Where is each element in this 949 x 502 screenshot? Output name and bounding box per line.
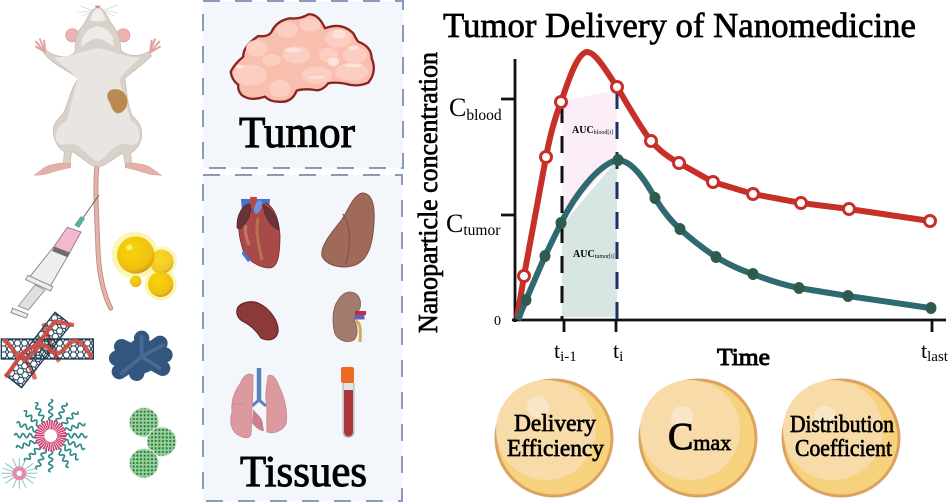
label: t i-1: i-1 [560,349,577,365]
tumor curve [518,154,936,320]
title: Tumor Delivery of Nanomedicine [443,6,916,45]
blood curve [517,52,936,318]
label: t i: t [613,338,619,363]
heading: Tissues: Tissues [240,447,367,496]
icon: kidney [333,292,365,342]
metric circle: Cmax: max [693,430,731,455]
chart: nanoparticle concentration over time [413,52,949,371]
mouse tail [96,165,111,308]
icon: syringe [11,195,99,318]
icon: tumor mass [231,14,374,102]
mouse tumor [107,89,128,114]
metric circle: distribution coefficient: Distribution [790,412,894,438]
icon: carbon nanotube with DNA ribbon [1,312,93,388]
label: t last: last [927,349,949,365]
label: C tumor: C [446,209,463,238]
dashed line: t i [616,92,618,320]
heading: Tumor: Tumor [239,108,355,157]
label: t i-1: t [554,338,560,363]
label: C blood: blood [466,107,502,124]
shaded area: AUC tumor [562,160,617,317]
metric circle: delivery efficiency: Efficiency [507,436,604,462]
icon: lungs [231,368,287,438]
metric circle: distribution coefficient [783,380,899,496]
label: t i: i [619,349,623,365]
panel: tumor [203,1,403,168]
dashed line: t i-1 [560,106,564,320]
icon: gold nanoparticles [112,232,177,300]
icon: liver [322,193,374,267]
label: AUC blood: AUC [572,125,594,136]
x axis title: Time [717,345,770,371]
label: C tumor: tumor [463,222,501,239]
label: AUC tumor: AUC [573,249,595,260]
icon: green porous nanoparticles [129,408,176,478]
y axis title: Nanoparticle concentration [413,52,443,333]
metric circle: Cmax: C [668,416,693,458]
shaded area: AUC blood [562,90,617,216]
label: t last: t [921,338,927,363]
icon: polymeric micelle [1,399,87,489]
metric circle: distribution coefficient: Coefficient [795,436,892,462]
label: AUC tumor: tumor[i] [595,254,615,260]
label: AUC blood: blood[i] [594,130,613,136]
axes [501,59,946,332]
label: C blood: C [449,93,466,122]
icon: dendrimer nanoparticle [117,337,165,373]
metric circle: Cmax [640,380,756,496]
icon: spleen [237,302,278,340]
icon: blood tube [341,367,354,437]
metric circle: delivery efficiency: Delivery [514,411,596,437]
icon: mouse [34,5,162,308]
icon: heart [237,197,280,268]
label: zero: 0 [494,314,501,329]
metric circle: delivery efficiency [496,380,612,496]
panel: tissues [203,175,402,501]
